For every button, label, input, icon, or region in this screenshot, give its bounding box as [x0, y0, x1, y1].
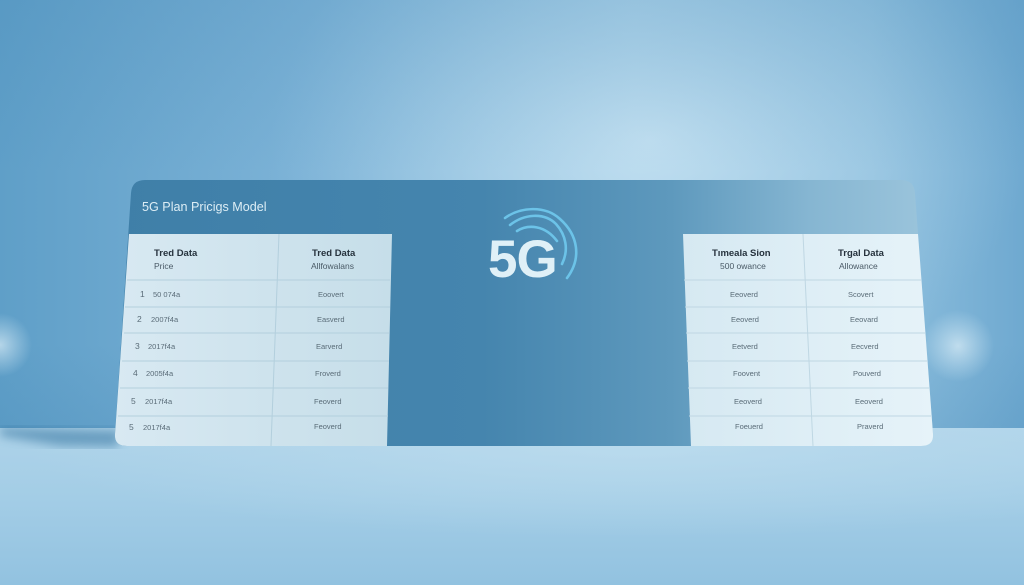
left table header: Tred Data	[312, 248, 356, 259]
left table rows: 1	[140, 289, 145, 299]
right table rows: Foeuerd	[735, 422, 763, 431]
left table rows: Eoovert	[318, 290, 345, 299]
logo text: 5G	[488, 230, 557, 289]
right table header: Tımeala Sion	[712, 248, 771, 259]
left table rows: 50 074a	[153, 290, 181, 299]
right table header: 500 owance	[720, 261, 766, 271]
right panel background	[683, 234, 933, 446]
left table rows: 2005f4a	[146, 369, 174, 378]
right table rows	[730, 290, 883, 431]
right table rows: Eecverd	[851, 342, 879, 351]
left table panel	[115, 234, 392, 446]
right table rows: Pouverd	[853, 369, 881, 378]
left table header: Allfowalans	[311, 261, 354, 271]
main pricing card	[115, 180, 933, 446]
left table rows: Earverd	[316, 342, 342, 351]
left table rows: 2017f4a	[145, 397, 173, 406]
right table rows: Foovent	[733, 369, 761, 378]
left table rows: Easverd	[317, 315, 345, 324]
left table rows: 2	[137, 314, 142, 324]
left table header: Price	[154, 261, 174, 271]
left table rows: 2017f4a	[143, 423, 171, 432]
5G logo	[488, 209, 576, 289]
card shadow	[0, 427, 120, 447]
right table grid	[684, 234, 931, 446]
logo signal arcs	[505, 209, 576, 278]
left table rows: Froverd	[315, 369, 341, 378]
right table rows: Eeoverd	[730, 290, 758, 299]
left table rows: 2017f4a	[148, 342, 176, 351]
right table rows: Praverd	[857, 422, 883, 431]
right table rows: Eetverd	[732, 342, 758, 351]
card body	[115, 180, 933, 446]
right table header	[712, 248, 885, 271]
right table panel	[683, 234, 933, 446]
left table rows	[129, 289, 345, 432]
right table rows: Eeoverd	[855, 397, 883, 406]
left table rows: 3	[135, 341, 140, 351]
left table rows: 5	[131, 396, 136, 406]
background floor	[0, 428, 1024, 585]
left table rows: Feoverd	[314, 422, 342, 431]
left light glow	[0, 313, 32, 377]
left table header	[154, 248, 356, 271]
card title: 5G Plan Pricigs Model	[142, 200, 267, 214]
right table rows: Scovert	[848, 290, 874, 299]
left table grid	[118, 234, 390, 446]
left table rows: 5	[129, 422, 134, 432]
right light glow	[922, 310, 994, 382]
left table rows: 2007f4a	[151, 315, 179, 324]
right table header: Allowance	[839, 261, 878, 271]
left table rows: 4	[133, 368, 138, 378]
right table rows: Eeovard	[850, 315, 878, 324]
left panel background	[115, 234, 392, 446]
left table header: Tred Data	[154, 248, 198, 259]
right table header: Trgal Data	[838, 248, 885, 259]
left table rows: Feoverd	[314, 397, 342, 406]
background wall	[0, 0, 1024, 430]
right table rows: Eeoverd	[734, 397, 762, 406]
right table rows: Eeoverd	[731, 315, 759, 324]
